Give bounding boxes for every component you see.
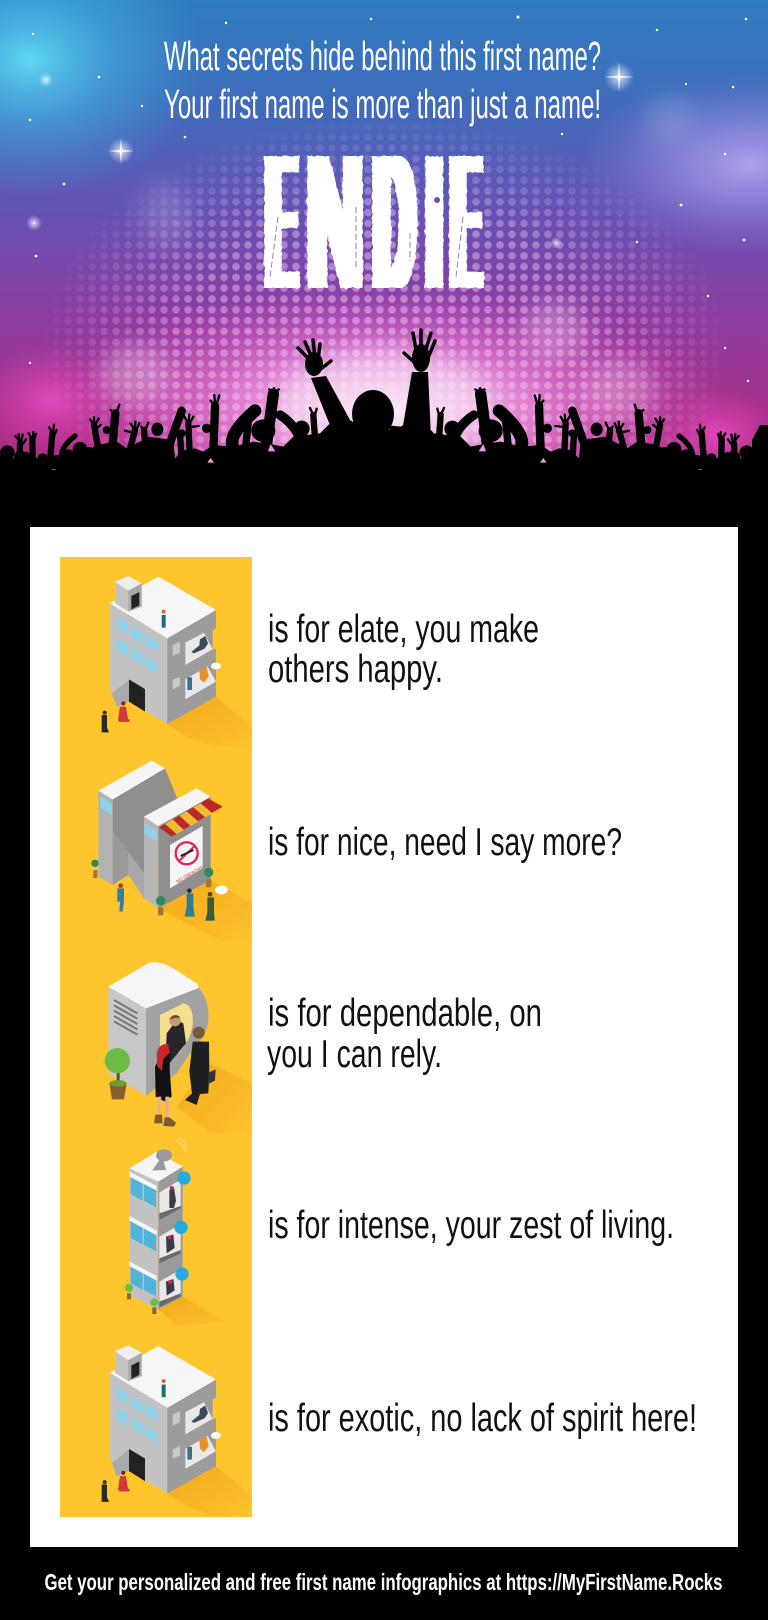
title: name ENDIE: D — [375, 117, 413, 328]
text: N line: is for nice, need I say more? — [268, 821, 622, 864]
text: E line: others happy. — [268, 648, 443, 691]
text: D line: you I can rely. — [267, 1033, 442, 1076]
title: name ENDIE: N — [308, 117, 362, 328]
yellow illustration column — [60, 557, 252, 1517]
header background — [0, 0, 768, 459]
title: name ENDIE: E — [268, 117, 295, 328]
illustration: letter D building — [105, 962, 252, 1133]
illustration: letter N building — [91, 761, 252, 941]
title: name ENDIE: I — [428, 117, 440, 328]
crowd silhouette — [0, 330, 768, 530]
text: E line: is for elate, you make — [268, 608, 539, 651]
infographic page: E — [453, 117, 479, 328]
white content panel — [30, 527, 738, 1547]
illustration: letter I building — [125, 1137, 227, 1325]
illustration: letter N building: NO SMOKING — [175, 865, 204, 884]
text: E line — [268, 608, 539, 691]
title: intro text — [164, 33, 601, 127]
sparkling stars — [26, 16, 749, 382]
illustration: letter E building — [102, 576, 252, 747]
text: D line: is for dependable, on — [268, 992, 542, 1035]
title: name ENDIE — [268, 117, 479, 328]
text: D line — [267, 992, 542, 1076]
illustration: letter E building (repeat) — [102, 1345, 252, 1517]
